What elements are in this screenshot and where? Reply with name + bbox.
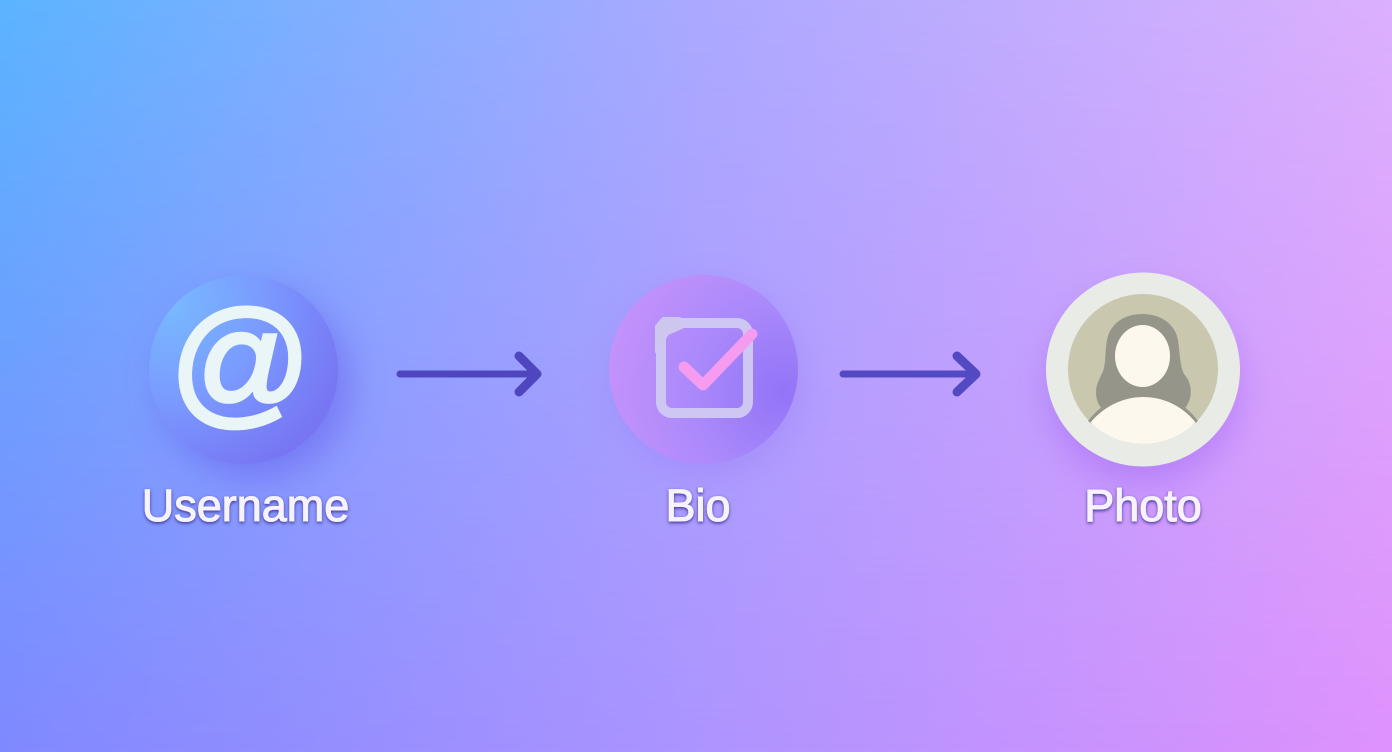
photo ring bbox=[1046, 272, 1240, 466]
checkbox frame bbox=[661, 323, 748, 413]
checkbox corner tab bbox=[656, 318, 682, 352]
check mark bbox=[684, 334, 752, 385]
shoulders bbox=[1090, 397, 1196, 444]
hair edge along shoulders bbox=[1088, 393, 1198, 424]
hair silhouette bbox=[1096, 314, 1191, 412]
label: Photo: Photo bbox=[1084, 480, 1202, 531]
arrow: bio to photo bbox=[843, 356, 976, 392]
step: username bbox=[142, 275, 350, 531]
step: photo bbox=[1046, 272, 1240, 531]
face bbox=[1115, 325, 1170, 387]
photo backdrop bbox=[1068, 294, 1218, 444]
icon: checkbox badge bbox=[609, 275, 800, 472]
label: Bio: Bio bbox=[665, 480, 731, 531]
icon: profile photo badge bbox=[1046, 272, 1240, 483]
icon: at sign badge bbox=[149, 275, 350, 478]
step: bio bbox=[609, 275, 800, 531]
label: Username: Username bbox=[142, 480, 349, 531]
icon: at sign badge: @ bbox=[169, 282, 312, 439]
arrow: username to bio bbox=[400, 356, 537, 392]
